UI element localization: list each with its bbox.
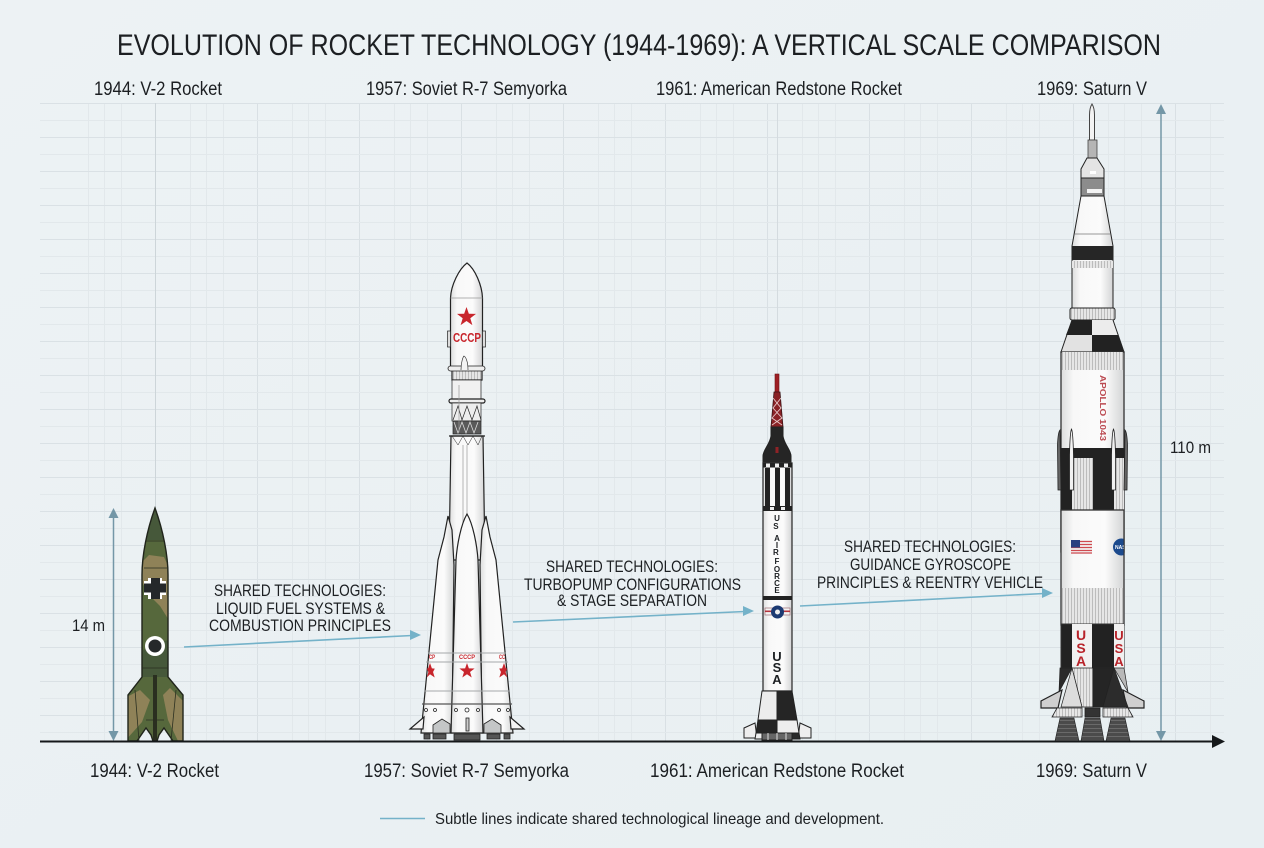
Saturn second stage — [1061, 352, 1124, 552]
Redstone USA lettering: U — [772, 649, 782, 664]
shared technologies: V-2 to R-7: LIQUID FUEL SYSTEMS & — [216, 599, 386, 618]
R-7 centre booster — [451, 514, 483, 733]
R-7 lower core — [449, 436, 485, 560]
Saturn USA panels: S — [1076, 640, 1086, 656]
shared technologies: Redstone to Saturn V: PRINCIPLES & REENTRY VEHICLE — [817, 573, 1043, 592]
Redstone US AIR FORCE lettering: R — [774, 572, 780, 581]
V-2 cross marking — [144, 578, 166, 599]
R-7 fins — [410, 717, 524, 729]
Redstone US AIR FORCE lettering: U — [774, 514, 780, 523]
Saturn USA panels: A — [1114, 654, 1124, 669]
Saturn ring — [1070, 308, 1115, 320]
arrow: R-7 to Redstone — [513, 606, 754, 622]
bottom rocket labels: 1961: American Redstone Rocket — [650, 761, 905, 782]
R-7 left booster — [421, 516, 454, 733]
top rocket labels: 1957: Soviet R-7 Semyorka — [366, 79, 567, 100]
Saturn engine shroud — [1059, 668, 1128, 707]
Redstone capsule — [763, 427, 791, 463]
arrow: V-2 to R-7 — [184, 630, 421, 647]
Redstone US AIR FORCE lettering: I — [776, 541, 778, 550]
height arrow: 14 m — [108, 508, 118, 741]
shared technologies: R-7 to Redstone: SHARED TECHNOLOGIES: — [546, 557, 718, 576]
Saturn black interstage — [1061, 448, 1124, 510]
Redstone US AIR FORCE lettering: O — [774, 565, 780, 574]
icon: NASA roundel: NASA — [1115, 545, 1130, 551]
shared technologies: R-7 to Redstone — [524, 557, 741, 610]
V-2 roundel marking — [145, 636, 165, 656]
shared technologies: R-7 to Redstone: TURBOPUMP CONFIGURATIONS — [524, 575, 741, 594]
bottom rocket labels: 1957: Soviet R-7 Semyorka — [364, 761, 569, 782]
Redstone body — [763, 463, 792, 691]
shared technologies: V-2 to R-7 — [209, 581, 391, 635]
Redstone US AIR FORCE lettering: S — [773, 522, 779, 531]
Redstone US AIR FORCE lettering: E — [774, 586, 780, 595]
R-7 red star upper — [457, 307, 476, 325]
Redstone US AIR FORCE lettering: F — [775, 557, 780, 566]
Saturn first stage — [1061, 510, 1124, 625]
height label: 110 m: 110 m — [1170, 438, 1211, 457]
Saturn USA panels — [1061, 624, 1124, 669]
Redstone US AIR FORCE lettering: R — [773, 548, 779, 557]
measurement grid — [40, 103, 1224, 741]
shared technologies: V-2 to R-7: COMBUSTION PRINCIPLES — [209, 616, 391, 635]
Saturn USA panels: U — [1076, 627, 1086, 643]
top rocket labels — [94, 79, 1147, 100]
rocket: Redstone — [744, 374, 811, 740]
shared technologies: R-7 to Redstone: & STAGE SEPARATION — [557, 591, 707, 610]
height label: 14 m: 14 m — [72, 616, 105, 635]
Redstone USA lettering: S — [773, 660, 782, 675]
top rocket labels: 1969: Saturn V — [1037, 79, 1147, 100]
Saturn APOLLO lettering: APOLLO 1043 — [1098, 375, 1107, 442]
Redstone US AIR FORCE lettering: A — [774, 534, 780, 543]
R-7 interstage — [449, 370, 485, 540]
Saturn engine collars — [1052, 708, 1133, 717]
Redstone escape tower — [771, 374, 783, 427]
shared technologies: Redstone to Saturn V: SHARED TECHNOLOGIES: — [844, 537, 1016, 556]
Redstone US AIR FORCE lettering: C — [774, 579, 780, 588]
Saturn checkered transition — [1061, 320, 1124, 352]
R-7 right booster — [480, 516, 513, 733]
R-7 small markings: CC — [499, 655, 505, 661]
rocket: R-7 Semyorka — [410, 263, 524, 740]
icon: NASA roundel — [1113, 538, 1124, 556]
shared technologies: Redstone to Saturn V — [817, 537, 1043, 592]
rocket: V-2 — [127, 506, 184, 740]
Redstone checkered skirt — [744, 691, 811, 740]
Saturn USA panels: U — [1114, 628, 1124, 643]
legend: Subtle lines indicate shared technological lineage and development. — [435, 811, 884, 828]
R-7 CCCP lettering: CCCP — [453, 330, 481, 345]
Saturn service module — [1081, 178, 1104, 196]
Saturn USA panels: A — [1076, 653, 1086, 669]
R-7 red stars lower — [427, 663, 507, 677]
arrow: Redstone to Saturn V — [800, 588, 1053, 606]
Saturn fins — [1041, 690, 1144, 708]
R-7 small markings: CCCP — [459, 655, 475, 661]
R-7 small markings: CP — [429, 655, 435, 661]
Redstone stripes — [763, 463, 792, 600]
shared technologies: V-2 to R-7: SHARED TECHNOLOGIES: — [214, 581, 386, 600]
Redstone USA lettering: A — [772, 672, 782, 687]
Saturn escape tower — [1088, 104, 1097, 158]
shared technologies: Redstone to Saturn V: GUIDANCE GYROSCOPE — [850, 555, 1011, 574]
top rocket labels: 1944: V-2 Rocket — [94, 79, 223, 100]
rocket: Saturn V — [1041, 104, 1144, 741]
baseline axis — [40, 735, 1225, 748]
Saturn engines — [1055, 718, 1130, 741]
height arrow: 110 m — [1156, 104, 1166, 741]
R-7 bands — [424, 653, 510, 691]
Redstone roundel — [765, 606, 790, 618]
Saturn fairings — [1058, 429, 1128, 490]
bottom rocket labels: 1944: V-2 Rocket — [90, 761, 220, 782]
R-7 engine skirts — [424, 708, 510, 740]
R-7 small markings — [429, 655, 505, 661]
Saturn third stage — [1072, 196, 1113, 308]
R-7 nose and upper stage — [450, 263, 482, 370]
icon: American flag — [1071, 540, 1092, 554]
bottom rocket labels: 1969: Saturn V — [1036, 761, 1147, 782]
Saturn USA panels: S — [1115, 641, 1124, 656]
Saturn command module — [1081, 158, 1104, 178]
top rocket labels: 1961: American Redstone Rocket — [656, 79, 903, 100]
bottom rocket labels — [90, 761, 1147, 782]
